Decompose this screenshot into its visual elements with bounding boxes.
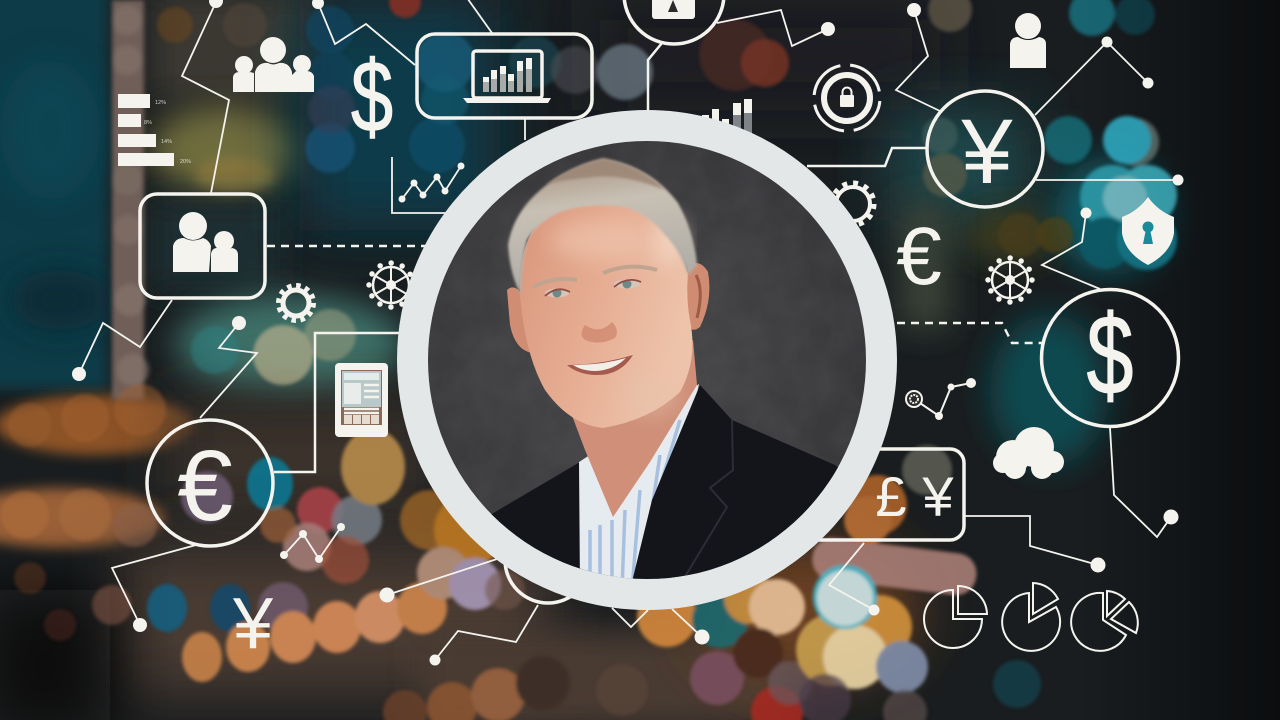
icon: small line chart: [280, 523, 345, 563]
icon: pie charts: [924, 583, 1138, 651]
icon: cloud: [993, 427, 1064, 479]
icon: euro circle: [147, 420, 273, 546]
icon: people group: [233, 37, 314, 92]
face: [520, 202, 692, 428]
hair: [508, 158, 697, 295]
icon: shield keyhole: [1122, 197, 1174, 265]
icon: line chart: [398, 162, 464, 202]
currency box: [800, 449, 964, 540]
icon: yen circle: ¥: [960, 101, 1013, 203]
neck: [568, 340, 697, 517]
nose: [582, 322, 617, 343]
bar chart: percent bars: 14%: [161, 139, 172, 145]
tower lights: [112, 0, 149, 400]
bar chart: percent bars: 8%: [144, 120, 152, 126]
shirt: [579, 384, 699, 590]
icon: user: [1010, 13, 1046, 68]
photo backdrop: [420, 135, 880, 585]
icon: gear small: [278, 286, 314, 320]
icon: bar chart behind portrait: [702, 99, 752, 135]
mouth: [567, 355, 633, 375]
icon: dollar circle: $: [1087, 293, 1133, 419]
eyes: [545, 280, 641, 298]
icon: euro circle: €: [177, 430, 233, 542]
suit left shoulder: [491, 462, 588, 571]
icon: laptop chart box: [417, 34, 592, 118]
suit right: [632, 385, 838, 579]
icon: top lock circle: [624, 0, 724, 44]
bar chart: percent bars: [118, 94, 191, 166]
icon: gear near portrait: [832, 183, 874, 225]
icon: yen sign: ¥: [232, 584, 274, 664]
icon: yen circle: [927, 91, 1043, 207]
hair top brown: [545, 160, 665, 190]
lapel: [683, 420, 733, 580]
icon: node chart: [906, 378, 976, 420]
icon: dollar sign: $: [351, 39, 393, 152]
icon: wheel gear: [369, 263, 413, 307]
icon: lock target: [814, 65, 880, 131]
currency box: £: [875, 465, 907, 528]
icon: bottom circle: [505, 517, 591, 603]
icon: euro sign: €: [896, 211, 942, 302]
network connector lines: [79, 0, 1178, 660]
icon: users box: [140, 194, 265, 298]
dashed connector lines: [267, 246, 1042, 343]
ears: [507, 263, 709, 353]
face shading: [550, 214, 684, 415]
icon: wheel gear right: [988, 258, 1032, 302]
currency box: ¥: [921, 465, 954, 528]
bar chart: percent bars: 12%: [155, 100, 166, 106]
bar chart: percent bars: 20%: [180, 159, 191, 165]
portrait ring: [413, 126, 881, 594]
icon: tablet: [335, 363, 388, 437]
brows: [533, 267, 657, 287]
portrait photo: [420, 135, 880, 590]
icon: dollar circle: [1042, 290, 1178, 426]
